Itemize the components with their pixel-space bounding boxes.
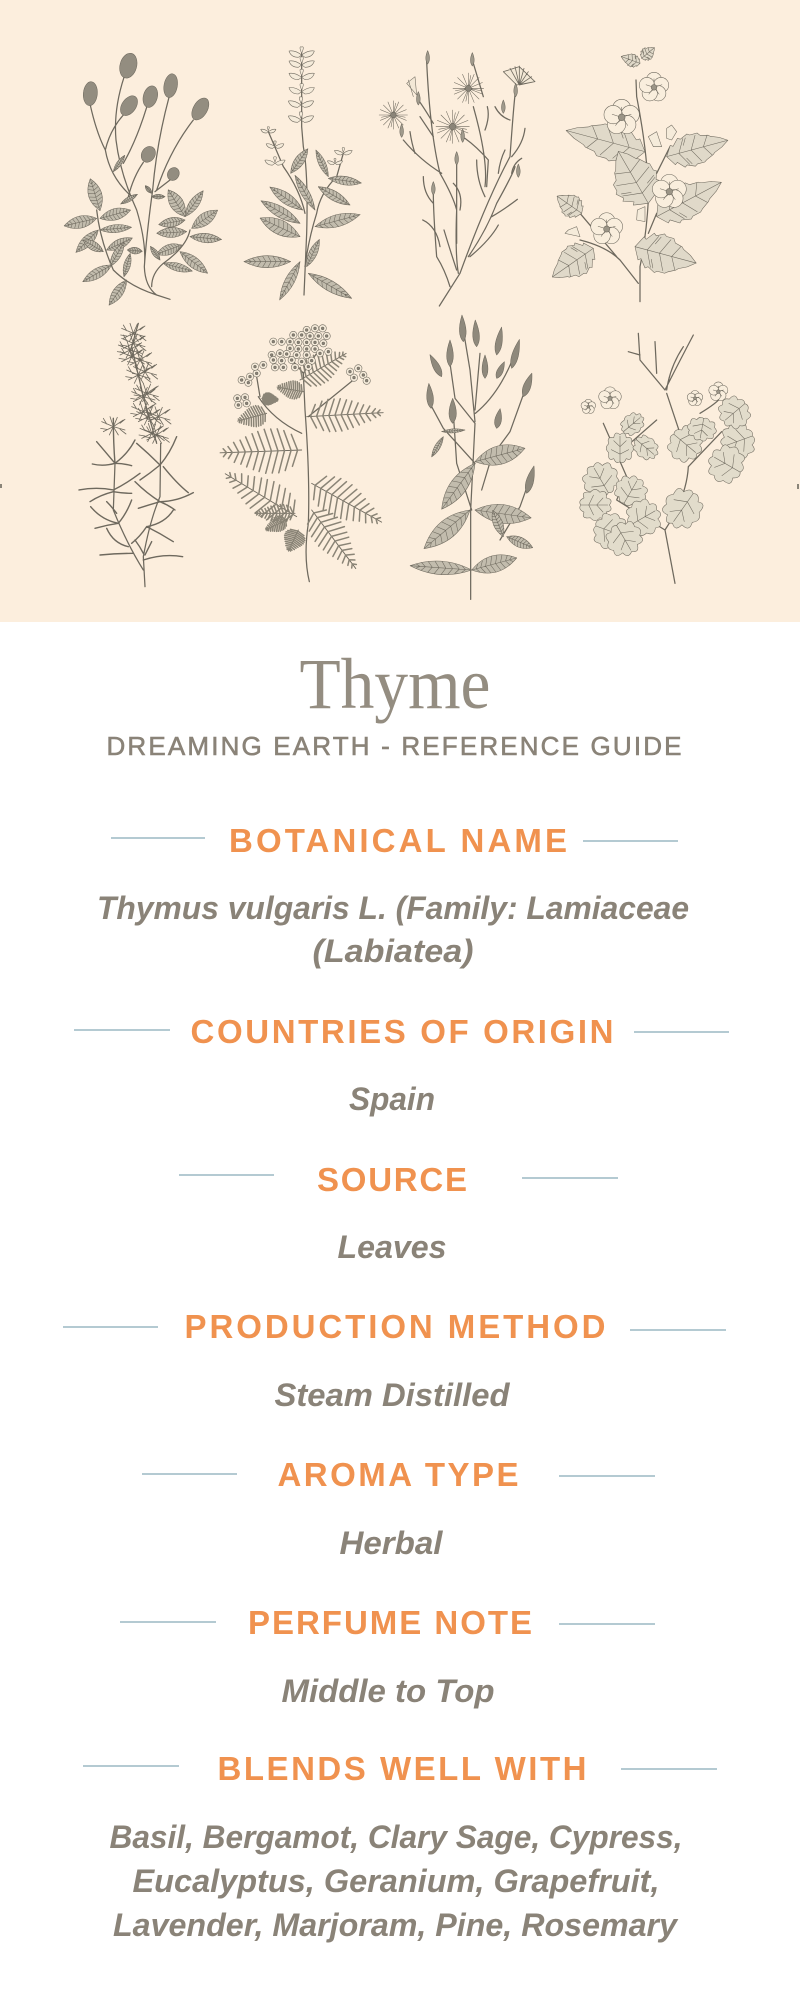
section: source: Leaves [338,1229,446,1265]
section: aroma type: AROMA TYPE [278,1456,518,1493]
section: botanical name: BOTANICAL NAME [229,822,567,859]
header background panel [0,0,800,622]
section: aroma type: Herbal [340,1525,444,1561]
section: botanical name: (Labiatea) [312,933,474,969]
plant: verbena [410,315,538,599]
section: source [179,1161,618,1265]
section: blends well with: Eucalyptus, Geranium, Grapefruit, [132,1863,660,1899]
section: perfume note: PERFUME NOTE [248,1604,532,1641]
plant: mallow [543,43,732,302]
section: blends well with [83,1750,717,1943]
plant: cornflower [379,51,535,306]
section: production method: Steam Distilled [274,1377,511,1413]
plant: sage with flower spike [244,47,362,303]
section: blends well with: BLENDS WELL WITH [218,1750,586,1787]
section: perfume note [120,1604,655,1709]
section: blends well with: Lavender, Marjoram, Pine, Rosemary [113,1907,679,1943]
plant: burnet with oval flower heads [63,51,222,308]
plant: hyssop with needle leaves [79,323,193,587]
section: perfume note: Middle to Top [282,1673,494,1709]
plant: tansy with fern leaves [216,325,391,582]
section: blends well with: Basil, Bergamot, Clary Sage, Cypress, [110,1819,682,1855]
section: botanical name [97,822,689,969]
title: Thyme [300,644,490,724]
section: production method: PRODUCTION METHOD [184,1308,606,1345]
section: botanical name: Thymus vulgaris L. (Family: Lamiaceae [97,890,689,926]
section: countries of origin: Spain [349,1081,435,1117]
specks at header edges [0,484,799,489]
section: aroma type [142,1456,655,1561]
subtitle: DREAMING EARTH - REFERENCE GUIDE [106,731,682,761]
section: countries of origin: COUNTRIES OF ORIGIN [190,1013,614,1050]
section: production method [63,1308,726,1413]
plant: celandine with lobed leaves [577,333,760,583]
section: countries of origin [74,1013,729,1117]
section: source: SOURCE [317,1161,467,1198]
